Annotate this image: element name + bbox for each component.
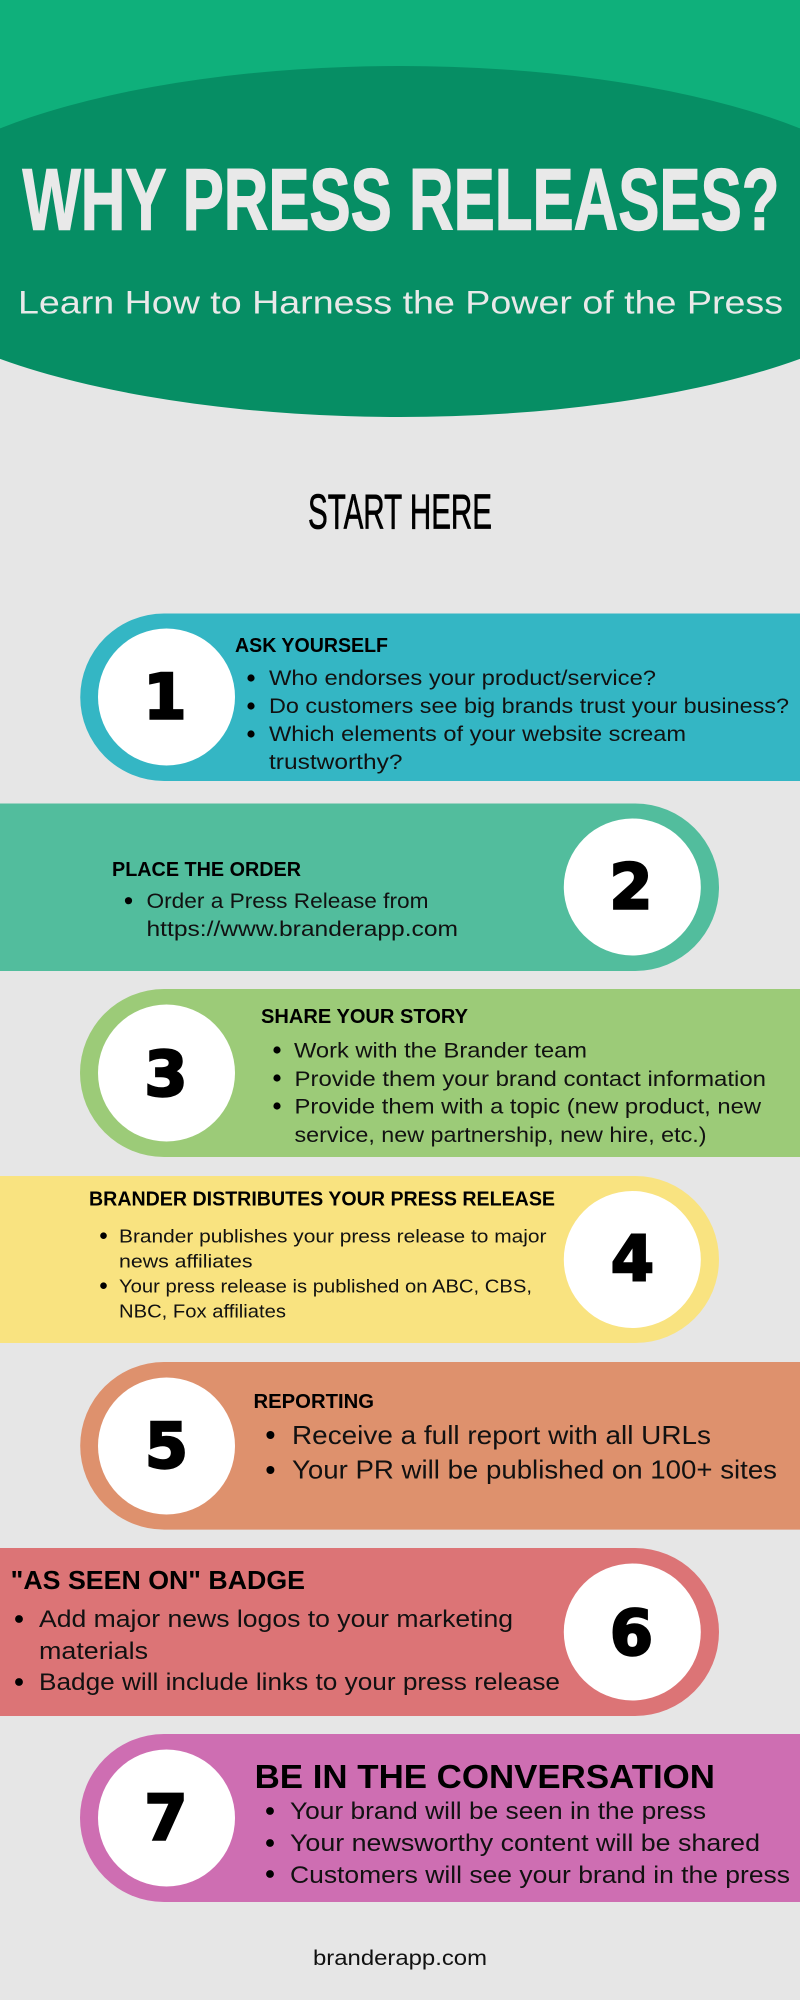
step 1 bullet list: Do customers see big brands trust your business? bbox=[269, 695, 789, 718]
step 1 bullet list: Which elements of your website scream bbox=[269, 723, 686, 746]
step 4 panel: brander distributes bbox=[0, 1176, 719, 1343]
step 1 number badge bbox=[98, 628, 235, 766]
step 1 number badge: 1 bbox=[143, 660, 187, 734]
step 7 bullet list: Customers will see your brand in the press bbox=[290, 1862, 790, 1889]
step 6 number badge bbox=[564, 1564, 701, 1700]
step 1 bullet list: Who endorses your product/service? bbox=[269, 667, 656, 690]
step 4 bullet list: news affiliates bbox=[119, 1250, 252, 1272]
step 7 panel: be in the conversation bbox=[80, 1734, 800, 1902]
step 4 bullet list bbox=[100, 1226, 546, 1322]
step 4 heading: BRANDER DISTRIBUTES YOUR PRESS RELEASE bbox=[89, 1188, 555, 1211]
step 3 heading: SHARE YOUR STORY bbox=[261, 1005, 468, 1028]
step 6 heading: "AS SEEN ON" BADGE bbox=[11, 1567, 305, 1595]
footer url: branderapp.com bbox=[313, 1947, 487, 1970]
step 6 panel: as seen on badge bbox=[0, 1548, 719, 1716]
step 5 panel: reporting bbox=[80, 1362, 800, 1530]
step 1 panel: ask yourself bbox=[80, 614, 800, 781]
step 3 panel: share your story bbox=[80, 989, 800, 1157]
step 6 number badge: 6 bbox=[610, 1596, 653, 1670]
subtitle: Learn How to Harness the Power of the Press bbox=[18, 284, 783, 320]
step 3 bullet list: Provide them your brand contact information bbox=[294, 1068, 766, 1091]
step 2 number badge bbox=[564, 818, 701, 956]
step 7 bullet list bbox=[266, 1798, 790, 1889]
step 6 bullet list bbox=[15, 1606, 560, 1696]
step 4 bullet list: NBC, Fox affiliates bbox=[119, 1300, 286, 1322]
step 5 bullet list: Your PR will be published on 100+ sites bbox=[292, 1455, 777, 1485]
step 2 bullet list: Order a Press Release from bbox=[146, 890, 428, 913]
step 6 bullet list: Add major news logos to your marketing bbox=[39, 1606, 513, 1633]
header banner bbox=[0, 0, 800, 417]
start here heading: START HERE bbox=[308, 486, 492, 540]
step 7 number badge bbox=[98, 1750, 235, 1886]
step 3 bullet list: service, new partnership, new hire, etc.) bbox=[294, 1124, 706, 1147]
step 4 bullet list: Your press release is published on ABC, CBS, bbox=[119, 1276, 532, 1296]
step 3 bullet list bbox=[273, 1040, 766, 1147]
step 6 bullet list: Badge will include links to your press release bbox=[39, 1669, 560, 1696]
step 5 number badge: 5 bbox=[145, 1410, 188, 1482]
step 2 heading: PLACE THE ORDER bbox=[112, 858, 301, 881]
step 4 number badge bbox=[564, 1191, 701, 1328]
step 1 heading: ASK YOURSELF bbox=[235, 634, 388, 657]
step 6 bullet list: materials bbox=[39, 1638, 148, 1665]
step 2 bullet list bbox=[125, 890, 458, 941]
step 5 heading: REPORTING bbox=[254, 1390, 374, 1413]
step 2 panel: place the order bbox=[0, 804, 719, 971]
step 5 bullet list: Receive a full report with all URLs bbox=[292, 1420, 711, 1450]
step 2 bullet list: https://www.branderapp.com bbox=[146, 918, 458, 941]
step 7 heading: BE IN THE CONVERSATION bbox=[255, 1758, 715, 1795]
step 7 number badge: 7 bbox=[144, 1782, 188, 1854]
step 7 bullet list: Your brand will be seen in the press bbox=[290, 1798, 706, 1825]
step 1 bullet list bbox=[247, 667, 789, 774]
step 1 bullet list: trustworthy? bbox=[269, 751, 402, 774]
step 3 bullet list: Work with the Brander team bbox=[294, 1040, 587, 1062]
step 4 number badge: 4 bbox=[611, 1222, 654, 1296]
step 7 bullet list: Your newsworthy content will be shared bbox=[290, 1830, 760, 1857]
step 4 bullet list: Brander publishes your press release to major bbox=[119, 1226, 546, 1246]
step 2 number badge: 2 bbox=[609, 850, 653, 924]
step 5 bullet list bbox=[266, 1420, 777, 1485]
step 3 number badge: 3 bbox=[144, 1038, 188, 1110]
step 5 number badge bbox=[98, 1378, 235, 1514]
step 3 bullet list: Provide them with a topic (new product, new bbox=[294, 1096, 762, 1119]
step 3 number badge bbox=[98, 1004, 235, 1142]
